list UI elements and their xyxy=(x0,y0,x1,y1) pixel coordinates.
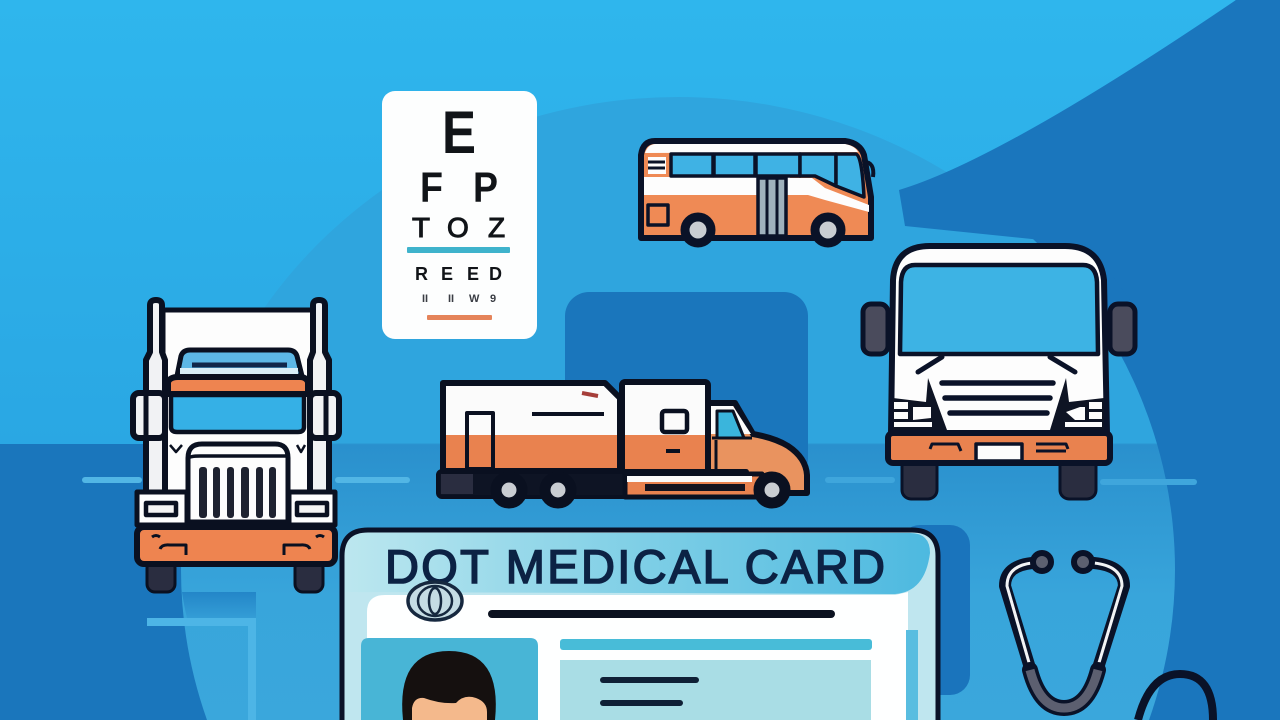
eye chart letter rows: E xyxy=(467,264,479,284)
background dark ledge behind bus xyxy=(899,0,1280,300)
card seal xyxy=(408,582,462,620)
eye chart letter rows: O xyxy=(447,212,469,243)
side-view bus xyxy=(641,141,873,243)
bus windows xyxy=(671,154,864,197)
front bus headlights xyxy=(893,378,1104,430)
card white body xyxy=(367,592,908,720)
card photo xyxy=(361,638,538,720)
truck cab top window xyxy=(177,350,302,376)
truck fenders and headlights xyxy=(137,492,187,525)
background lower band xyxy=(0,444,1280,720)
eye chart letter rows: P xyxy=(473,164,498,212)
truck side mirrors xyxy=(133,393,165,438)
bus mirror xyxy=(864,162,873,177)
stethoscope xyxy=(1005,553,1213,720)
stethoscope ear tips xyxy=(1033,553,1051,571)
card teal bar xyxy=(560,639,872,650)
bus wheels xyxy=(685,217,711,243)
box truck cargo body xyxy=(443,383,620,471)
stethoscope cable xyxy=(1138,674,1213,720)
eye chart letter rows: Z xyxy=(488,212,505,243)
box truck side view xyxy=(438,382,807,503)
truck exhaust stacks xyxy=(146,300,165,495)
background shadow panel behind card xyxy=(900,525,970,695)
box truck sleeper cab xyxy=(622,382,708,472)
stethoscope binaural tubes xyxy=(1005,563,1124,668)
front-view bus xyxy=(863,246,1135,499)
front bus wipers xyxy=(918,357,1075,372)
truck orange visor xyxy=(168,377,308,394)
eye chart letter rows: II xyxy=(422,293,428,305)
front bus bumper xyxy=(888,433,1110,463)
truck wheels xyxy=(147,560,175,592)
truck orange bumper xyxy=(137,527,335,564)
eye chart letter rows: E xyxy=(442,99,476,166)
background sky xyxy=(0,0,1280,445)
truck hood grille xyxy=(188,444,288,522)
box truck lower skirt xyxy=(625,474,762,497)
card name line xyxy=(488,610,835,618)
background dark rounded square xyxy=(565,292,808,482)
card header band xyxy=(345,533,930,594)
truck windshield xyxy=(171,395,304,432)
background patch under truck xyxy=(182,592,256,618)
eye chart letter rows: E xyxy=(441,264,453,284)
stethoscope grey tube xyxy=(1030,670,1098,708)
background upper-right dark curve xyxy=(900,0,1280,720)
box truck wheels xyxy=(496,477,522,503)
box truck chassis xyxy=(438,471,628,497)
background circle shape xyxy=(181,97,1175,720)
background road lines xyxy=(82,477,1197,485)
card side bar xyxy=(906,630,918,720)
eye chart letter rows: T xyxy=(412,212,430,243)
eye chart letter rows: 9 xyxy=(490,293,496,305)
front bus mirrors xyxy=(863,304,888,354)
front bus wheels xyxy=(902,455,937,499)
card outline xyxy=(342,530,938,720)
semi truck front view xyxy=(133,300,339,592)
eye chart letter rows: W xyxy=(469,293,480,305)
eye chart letter rows: D xyxy=(489,264,502,284)
eye chart xyxy=(382,91,537,339)
DOT medical card xyxy=(342,530,938,720)
eye chart letter rows: II xyxy=(448,293,454,305)
eye chart letter rows xyxy=(412,99,505,305)
card info panel xyxy=(560,660,871,720)
eye chart letter rows: R xyxy=(415,264,428,284)
eye chart letter rows: F xyxy=(420,164,443,212)
box truck cab front xyxy=(708,403,807,493)
bus door xyxy=(758,178,786,236)
card title: DOT MEDICAL CARD xyxy=(385,540,885,593)
front bus grille xyxy=(942,383,1053,413)
front bus windshield xyxy=(900,265,1098,354)
background L-shaped line xyxy=(147,622,252,720)
front bus body xyxy=(891,246,1107,434)
